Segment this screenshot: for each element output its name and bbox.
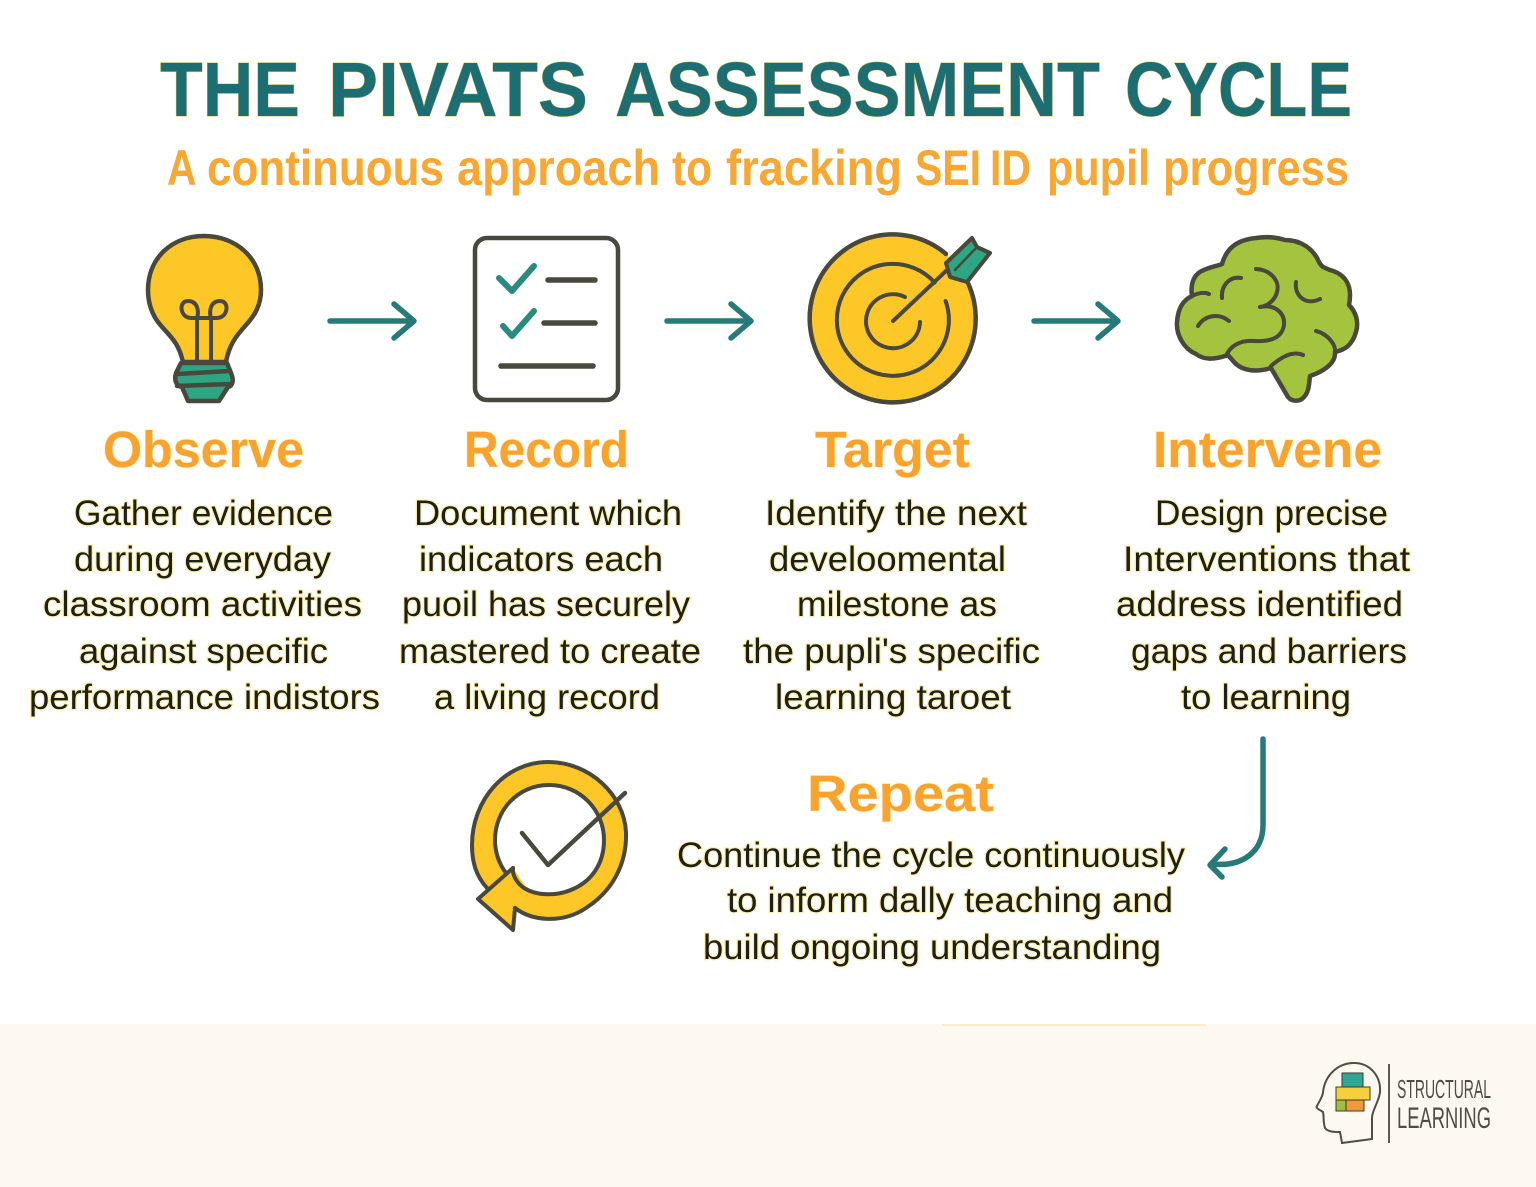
subtitle: to <box>672 140 712 196</box>
text: repeat description: Continue the cycle continuously <box>677 836 1186 875</box>
icon: brain <box>1177 237 1357 401</box>
text: target description: develoomental <box>769 540 1006 579</box>
subtitle: A <box>167 140 196 196</box>
text: target description: learning taroet <box>775 678 1011 717</box>
heading: record: Record <box>464 421 629 478</box>
text: intervene description <box>1116 494 1410 717</box>
icon: circular arrow with check <box>472 762 626 930</box>
icon: light bulb <box>148 236 261 401</box>
heading: target: Target <box>815 421 970 478</box>
heading: repeat: Repeat <box>807 765 994 822</box>
subtitle: fracking <box>726 140 902 196</box>
icon: head with blocks <box>1317 1063 1380 1143</box>
title: PIVATS <box>328 47 588 133</box>
text: observe description: during everyday <box>74 540 332 579</box>
text: record description: indicators each <box>419 540 663 579</box>
text: target description: the pupli's specific <box>743 632 1040 671</box>
panel: intervene <box>1116 237 1410 717</box>
text: observe description: Gather evidence <box>74 494 333 533</box>
panel: record <box>399 238 701 717</box>
text: intervene description: gaps and barriers <box>1131 632 1407 671</box>
text: observe description <box>29 494 380 717</box>
text: intervene description: to learning <box>1181 678 1351 717</box>
text: intervene description: address identified <box>1116 585 1403 624</box>
text: repeat description: build ongoing understanding <box>703 928 1161 967</box>
text: intervene description: Design precise <box>1155 494 1388 533</box>
heading: observe: Observe <box>103 421 304 478</box>
text: repeat description: to inform dally teaching and <box>727 881 1173 920</box>
panel: target <box>743 234 1040 717</box>
text: target description <box>743 494 1040 717</box>
subtitle: approach <box>457 140 660 196</box>
arrow: intervene to repeat <box>1210 739 1263 877</box>
text: record description <box>399 494 701 717</box>
text: repeat description <box>677 836 1186 967</box>
panel: observe <box>29 236 380 717</box>
title: CYCLE <box>1125 47 1352 133</box>
text: record description: a living record <box>434 678 660 717</box>
arrow: record to target <box>667 304 751 338</box>
heading: intervene: Intervene <box>1153 421 1382 478</box>
text: record description: Document which <box>414 494 682 533</box>
subtitle: pupil <box>1047 140 1150 196</box>
title: ASSESSMENT <box>615 47 1100 133</box>
title: THE <box>160 47 300 133</box>
icon: checklist <box>475 238 618 400</box>
text: observe description: performance indistors <box>29 678 380 717</box>
text: target description: Identify the next <box>765 494 1027 533</box>
subtitle: progress <box>1163 140 1349 196</box>
subtitle: ID <box>990 140 1031 196</box>
panel: repeat <box>472 762 1186 967</box>
subtitle: continuous <box>207 140 444 196</box>
text: observe description: classroom activities <box>43 585 362 624</box>
text: observe description: against specific <box>79 632 328 671</box>
footer band <box>0 1024 1536 1187</box>
arrow: target to intervene <box>1034 304 1118 338</box>
text: record description: puoil has securely <box>402 585 691 624</box>
logo: structural learning <box>1317 1063 1491 1143</box>
text: record description: mastered to create <box>399 632 701 671</box>
text: target description: milestone as <box>797 585 997 624</box>
subtitle: SEI <box>915 140 981 196</box>
arrow: observe to record <box>330 304 414 338</box>
icon: target with dart <box>810 234 990 402</box>
text: logo wordmark <box>1397 1074 1491 1135</box>
text: intervene description: Interventions that <box>1123 540 1410 579</box>
